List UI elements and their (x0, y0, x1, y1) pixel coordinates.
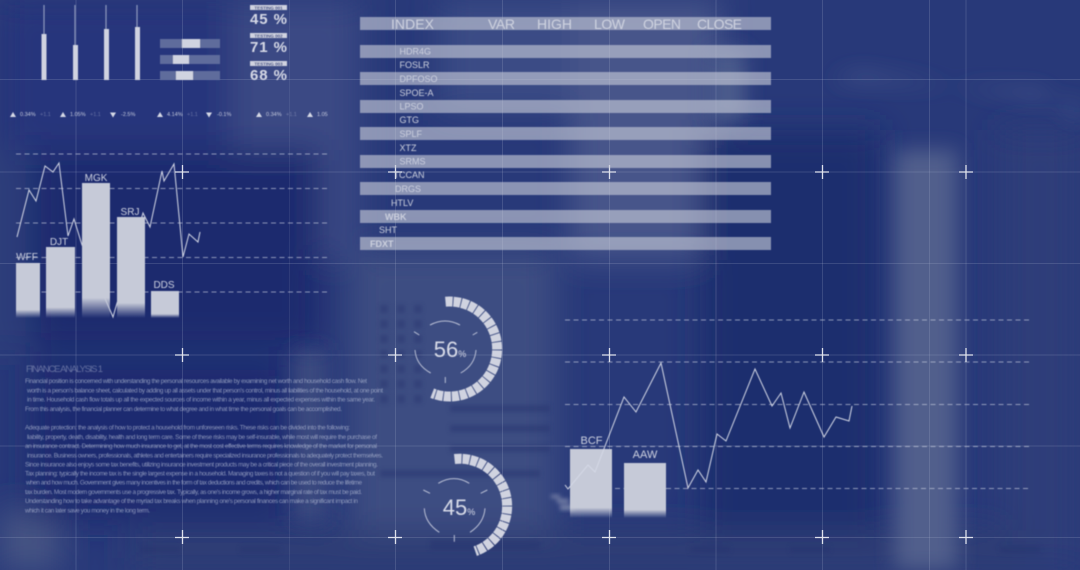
percentage readouts: TESTING 003 (254, 62, 283, 66)
paragraph two: an insurance contract. Determining how much insurance to get, at the most cost effective terms requires knowledge of the market for personal (25, 443, 377, 450)
paragraph two: which it can later save you money in the long term. (24, 508, 150, 514)
table index names: WBK (385, 212, 407, 222)
right line chart (565, 363, 852, 489)
table index names: SHT (379, 225, 398, 235)
table index names: HDR4G (400, 46, 431, 56)
table index names: FDXT (370, 239, 394, 249)
table index names: XTZ (400, 143, 417, 153)
paragraph two: tax burden. Most modern governments use a progressive tax. Typically, as one's income grows, a higher marginal rate of tax must be paid. (25, 489, 362, 496)
table header: OPEN (643, 16, 681, 32)
paragraph two: when and how much. Government gives many incentives in the form of tax deductions and credits, which can be used to reduce the lifetime (25, 480, 362, 486)
percentage readouts: 71 % (250, 39, 287, 56)
ticker row: +1.1 (286, 112, 297, 118)
table index names: SPOE-A (400, 88, 434, 98)
table header: INDEX (391, 16, 435, 32)
table index names: DPFOSO (400, 74, 438, 84)
text heading: FINANCE ANALYSIS 1 (26, 364, 103, 375)
table index names: DRGS (395, 184, 421, 194)
paragraph one (25, 378, 383, 413)
left bar chart: MGK (85, 173, 108, 184)
left line chart dashed guides (16, 154, 327, 292)
gauge 45% (423, 459, 507, 551)
right line chart dashed guides (565, 320, 1031, 488)
left bar chart: DDS (153, 280, 175, 291)
paragraph one: From this analysis, the financial planner can determine to what degree and in what time the personal goals can be accomplished. (25, 406, 342, 413)
paragraph two: Understanding how to take advantage of the myriad tax breaks when planning one's personal finances can make a significant impact in (25, 498, 358, 505)
chart smudges (551, 495, 574, 510)
table index names: FOSLR (400, 60, 430, 70)
ticker row: 0.34% (20, 112, 36, 118)
paragraph two: liability, property, death, disability, health and long term care. Some of these risks may be self-insurable, while most will require the purchase of (27, 434, 377, 441)
table header: LOW (594, 16, 626, 32)
table header: HIGH (537, 16, 572, 32)
table index names: LPSO (400, 102, 424, 112)
table index names: TCCAN (394, 170, 424, 180)
paragraph one: in time. Household cash flow totals up all the expected sources of income within a year, minus all expected expenses within the same year. (27, 396, 375, 404)
percentage readouts: 68 % (250, 67, 287, 84)
ticker row: +1.1 (40, 112, 51, 118)
gauge 56%: 56% (434, 337, 466, 362)
ticker row: +1.1 (90, 112, 101, 118)
ticker row (10, 112, 328, 118)
gauge 56% (414, 302, 497, 397)
table index names: SRMS (400, 156, 426, 166)
left bar chart: DJT (50, 237, 68, 248)
paragraph two: insurance. Business owners, professionals, athletes and entertainers require specialized insurance professionals to adequately protect themselves. (27, 452, 383, 460)
ticker row: 1.05% (70, 112, 86, 118)
grid crosshair markers (175, 165, 973, 544)
ticker row: -2.5% (121, 112, 135, 118)
table index names: HTLV (391, 198, 413, 208)
range bars (160, 39, 220, 80)
candlestick chart (42, 5, 140, 80)
percentage readouts (250, 5, 287, 84)
ticker row: 0.34% (266, 112, 282, 118)
ticker row: +1.1 (187, 112, 198, 118)
paragraph two (24, 424, 383, 514)
paragraph one: worth is a person's balance sheet, calculated by adding up all assets under that person's control, minus all liabilities of the household, at one point (26, 388, 383, 394)
table row stripes (360, 17, 771, 250)
percentage readouts: TESTING 001 (254, 6, 283, 10)
left bar chart: WFF (16, 252, 38, 263)
percentage readouts: 45 % (250, 11, 287, 28)
table index names (370, 46, 438, 249)
paragraph two: Adequate protection: the analysis of how to protect a household from unforeseen risks. These risks can be divided into the following: (25, 424, 350, 432)
left bar chart: SRJ (121, 207, 139, 218)
table header (391, 16, 742, 32)
ticker row: 1.05 (317, 112, 328, 118)
right bar chart (570, 435, 666, 518)
gauge 45%: 45% (443, 495, 475, 520)
paragraph two: Since insurance also enjoys some tax benefits, utilizing insurance investment products may be a critical piece of the overall investment planning. (25, 462, 378, 468)
financial analysis text block (24, 364, 383, 514)
table (360, 16, 771, 250)
ticker row: -0.1% (217, 112, 231, 118)
percentage readouts: TESTING 002 (254, 34, 283, 38)
paragraph two: Tax planning: typically the income tax is the single largest expense in a household. Managing taxes is not a question of if you will pay taxes, but (25, 470, 375, 478)
ticker row: 4.14% (167, 112, 183, 118)
right bar chart: AAW (633, 449, 658, 461)
left bar chart (16, 173, 179, 318)
left line chart (17, 163, 200, 317)
table index names: GTG (400, 115, 419, 125)
right bar chart: BCF (580, 435, 603, 447)
table index names: SPLF (400, 129, 423, 139)
paragraph one: Financial position is concerned with understanding the personal resources available by examining net worth and household cash flow. Net (25, 378, 367, 385)
table header: CLOSE (697, 16, 742, 32)
table header: VAR (488, 16, 515, 32)
